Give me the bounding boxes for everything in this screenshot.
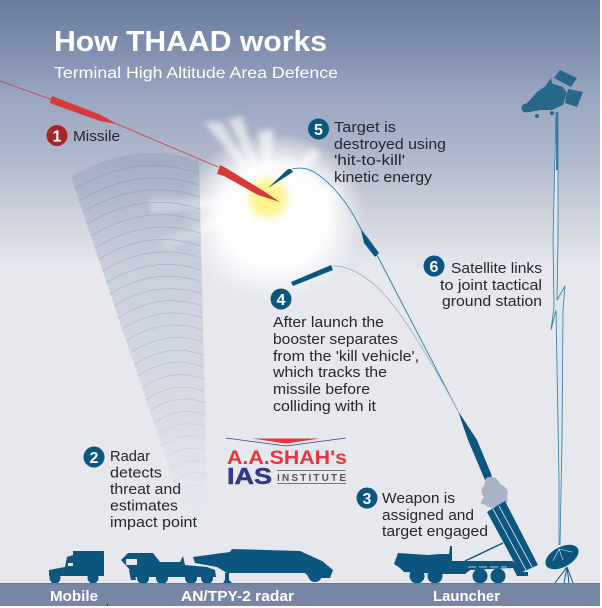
title: How THAAD works <box>54 26 327 58</box>
step 6: Satellite links: ground station <box>442 294 542 310</box>
step 3: Weapon: Weapon is <box>382 491 455 507</box>
step 5: Target destroyed: destroyed using <box>334 137 446 153</box>
logo: A.A.Shah's IAS Institute: IAS <box>227 463 272 489</box>
step 5: Target destroyed: 'hit-to-kill' <box>334 153 405 169</box>
step 3: Weapon <box>356 488 488 540</box>
step 3: Weapon: target engaged <box>382 524 488 540</box>
label: Launcher: Launcher <box>433 589 500 605</box>
step 2: Radar: impact point <box>110 515 197 531</box>
step 3: Weapon: assigned and <box>382 508 474 524</box>
blast: explosion flash <box>150 116 366 300</box>
logo: A.A.Shah's IAS Institute: A.A.SHAH's <box>227 448 347 469</box>
step 4: booster separation: missile before <box>273 382 370 398</box>
label: Mobile: Mobile <box>50 589 98 605</box>
label: AN/TPY-2 radar: AN/TPY-2 radar <box>181 589 294 605</box>
AN/TPY-2 radar vehicle and trailer <box>121 549 333 584</box>
ground station dish <box>541 540 583 583</box>
logo: A.A.Shah's IAS Institute: INSTITUTE <box>277 473 346 484</box>
step 3: Weapon: 3 <box>363 491 372 508</box>
subtitle: Terminal High Altitude Area Defence <box>54 65 338 82</box>
separated booster <box>291 265 333 286</box>
step 2: Radar: detects <box>110 466 162 482</box>
step 6: Satellite links <box>424 256 542 310</box>
step 4: booster separation: from the 'kill vehicle', <box>273 349 419 365</box>
rocket <box>458 411 492 480</box>
step 5: Target destroyed: 5 <box>314 122 323 139</box>
blast core <box>242 172 294 224</box>
step 6: Satellite links: to joint tactical <box>440 278 542 294</box>
step 2: Radar: 2 <box>90 450 99 467</box>
satellite <box>522 70 583 118</box>
step 1: Missile: 1 <box>53 128 62 146</box>
interceptor flight path <box>268 168 458 411</box>
step 4: booster separation: which tracks the <box>272 365 387 381</box>
kill vehicle <box>268 169 293 188</box>
step 2: Radar: estimates <box>110 498 178 514</box>
smoke plume <box>481 477 508 508</box>
step 5: Target destroyed: kinetic energy <box>334 170 433 186</box>
step 5: Target destroyed <box>308 118 446 186</box>
step 4: booster separation <box>270 288 419 415</box>
truck <box>394 546 513 574</box>
logo: A.A.Shah's IAS Institute <box>226 438 347 489</box>
background sky gradient <box>0 0 600 270</box>
step 6: Satellite links: 6 <box>430 259 439 276</box>
step 5: Target destroyed: Target is <box>334 120 396 136</box>
missile canister <box>487 501 538 573</box>
satellite link beam <box>551 112 565 545</box>
missile trajectory and red missile <box>0 81 280 202</box>
step 2: Radar: Radar <box>110 449 150 465</box>
step 2: Radar <box>84 446 197 531</box>
mobile command truck <box>49 551 104 584</box>
step 6: Satellite links: Satellite links <box>451 261 542 277</box>
step 4: booster separation: After launch the <box>273 315 384 331</box>
launcher with rocket and smoke <box>394 411 538 584</box>
booster upper stage <box>361 230 379 257</box>
ground band <box>0 583 600 606</box>
step 4: booster separation: colliding with it <box>273 399 376 415</box>
step 4: booster separation: 4 <box>277 292 286 309</box>
step 1: Missile: Missile <box>73 129 120 145</box>
radar beam fan <box>71 153 208 530</box>
lower pale background <box>0 270 600 586</box>
step 4: booster separation: booster separates <box>273 332 398 348</box>
step 1: Missile <box>46 125 120 146</box>
step 2: Radar: threat and <box>110 482 181 498</box>
